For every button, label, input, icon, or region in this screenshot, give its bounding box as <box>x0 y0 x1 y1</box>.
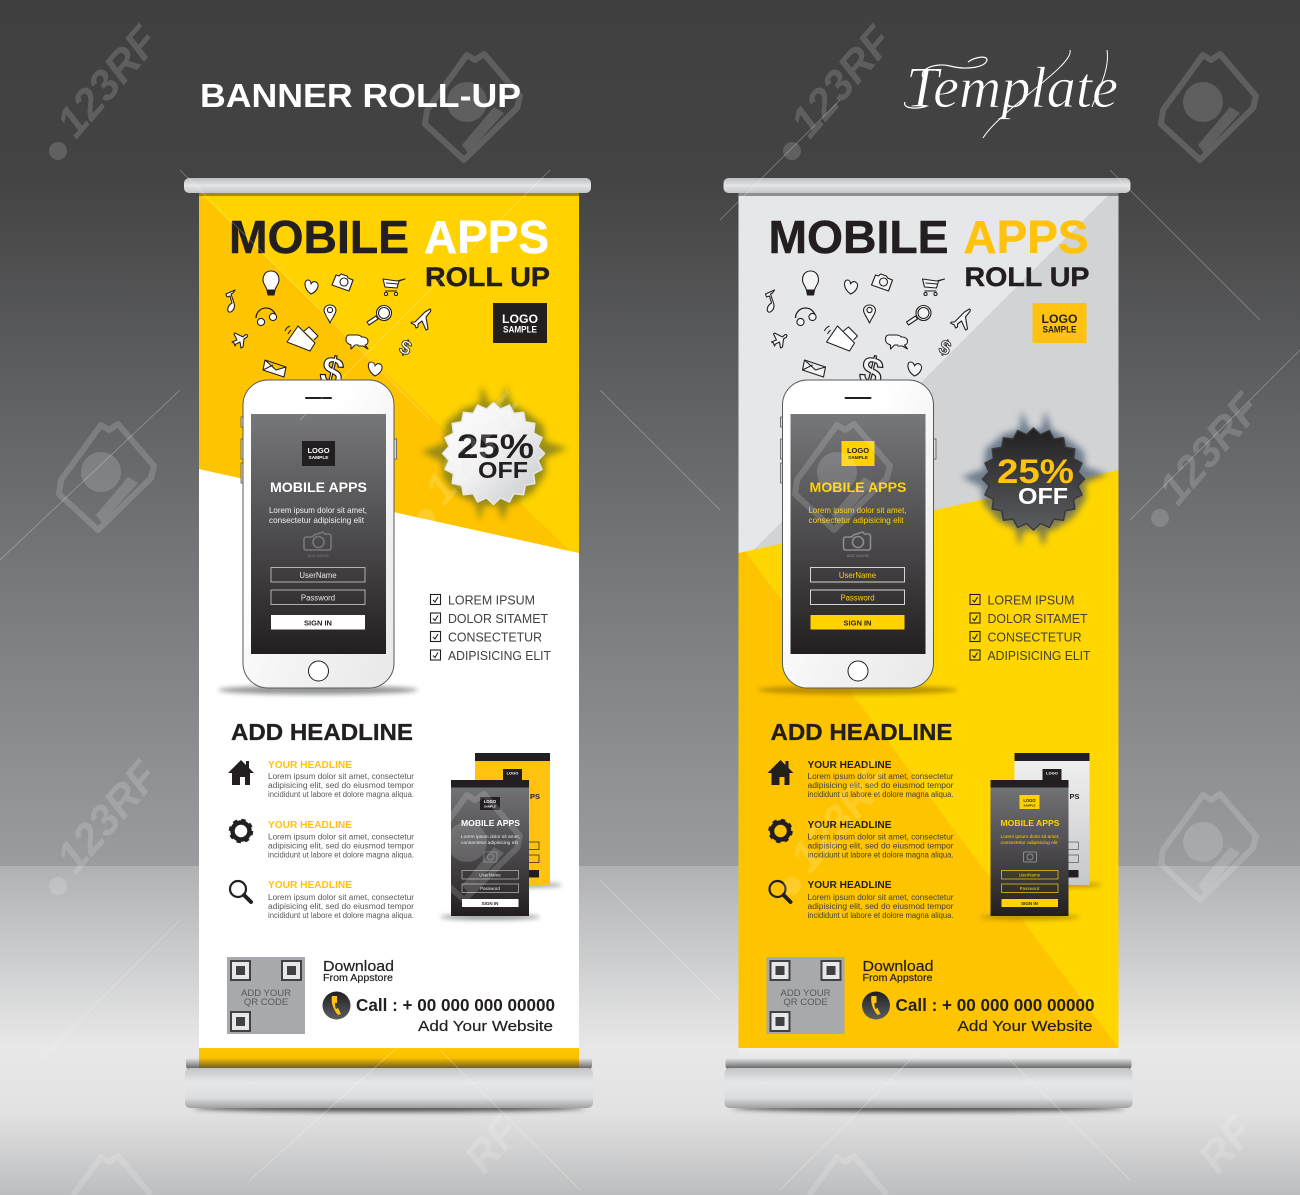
front app screen <box>980 780 1080 920</box>
feature one text: adipisicing elit, sed do eiusmod tempor <box>268 781 414 790</box>
camera icon: ADD IMAGE <box>307 553 330 558</box>
icon: home <box>768 760 794 785</box>
feature list <box>768 759 954 920</box>
feature two text: incididunt ut labore et dolore magna aliqua. <box>808 850 954 860</box>
screen text <box>269 505 367 525</box>
feature two text <box>268 819 414 860</box>
screen text: Lorem ipsum dolor sit amet, <box>808 505 906 515</box>
front app screen: UserName <box>1019 872 1041 878</box>
camera icon: ADD IMAGE <box>847 553 870 558</box>
feature three text: YOUR HEADLINE <box>268 879 352 891</box>
right banner bottom base <box>724 1068 1132 1108</box>
sign in button <box>810 615 904 630</box>
call number: Call : + 00 000 000 00000 <box>356 995 555 1015</box>
screen text: consectetur adipisicing elit <box>808 515 904 525</box>
phone call icon <box>862 992 890 1020</box>
front app screen: UserName <box>479 872 501 878</box>
password field <box>271 590 365 604</box>
username field: UserName <box>839 571 876 580</box>
feature two text <box>808 819 954 860</box>
checklist: DOLOR SITAMET <box>988 611 1088 626</box>
download label <box>323 958 394 984</box>
front app screen <box>440 780 540 920</box>
left banner panel <box>199 193 579 1048</box>
watermark overlay: RF <box>1189 1107 1264 1183</box>
home button <box>308 661 328 681</box>
floor shadow <box>193 1104 585 1112</box>
feature three text: adipisicing elit, sed do eiusmod tempor <box>268 902 414 911</box>
feature two text: Lorem ipsum dolor sit amet, consectetur <box>268 832 414 842</box>
logo box: LOGO <box>502 312 538 326</box>
back app screen: LOGO <box>1046 770 1058 776</box>
front app screen: Password <box>480 886 500 891</box>
front app screen: MOBILE APPS <box>461 818 520 828</box>
password field: Password <box>840 594 875 602</box>
download label: Download <box>862 958 934 975</box>
banner base shadow <box>726 1058 1132 1069</box>
wall background <box>0 0 1300 866</box>
feature three text: Lorem ipsum dolor sit amet, consectetur <box>808 893 954 902</box>
feature one text: Lorem ipsum dolor sit amet, consectetur <box>268 772 414 781</box>
front app screen: LOGO <box>484 799 497 804</box>
checklist: ADIPISICING ELIT <box>988 648 1090 663</box>
banner: right grey and yellow version <box>724 178 1132 1112</box>
headline: roll up: ROLL UP <box>425 262 550 292</box>
screen text <box>808 505 906 525</box>
feature one text: YOUR HEADLINE <box>808 759 892 771</box>
icon: search <box>230 881 251 902</box>
feature three text: Lorem ipsum dolor sit amet, consectetur <box>268 893 414 902</box>
screen logo: LOGO <box>307 446 330 455</box>
phone side buttons <box>780 417 936 483</box>
icon: search <box>770 881 790 902</box>
front app screen: LOGO <box>1023 798 1036 803</box>
camera icon <box>304 532 331 558</box>
checklist <box>430 592 551 663</box>
phone body <box>243 380 394 688</box>
phone mockup <box>241 380 396 688</box>
back app screen <box>475 753 562 888</box>
front app screen: Lorem ipsum dolor sit amet, <box>1000 834 1060 839</box>
icon: home <box>228 760 254 785</box>
watermark overlay: 123RF <box>1149 383 1271 514</box>
qr code box: QR CODE <box>244 997 288 1008</box>
feature one text <box>808 759 954 799</box>
add headline: ADD HEADLINE <box>231 719 413 745</box>
screen logo <box>302 441 335 466</box>
25% off badge: OFF <box>1018 483 1068 509</box>
phone shadow <box>758 686 958 694</box>
watermark overlay: 123RF <box>415 383 537 514</box>
logo box <box>1032 303 1086 343</box>
feature one text: adipisicing elit, sed do eiusmod tempor <box>808 781 954 790</box>
sign in button: SIGN IN <box>844 618 871 628</box>
phone shadow <box>218 686 418 694</box>
camera icon <box>844 532 870 558</box>
qr code box <box>227 957 305 1034</box>
watermark overlay: RF <box>455 1107 530 1183</box>
screen logo: LOGO <box>847 446 869 455</box>
page title: script template: Template <box>906 55 1118 120</box>
banner base shadow <box>186 1058 592 1069</box>
feature three text: incididunt ut labore et dolore magna aliqua. <box>268 911 414 920</box>
qr code box <box>766 957 844 1034</box>
front app screen: SAMPLE <box>484 804 496 808</box>
screen text: consectetur adipisicing elit <box>269 515 365 525</box>
download label: Download <box>323 958 394 975</box>
headline: mobile apps: MOBILE <box>768 211 948 263</box>
screen title: MOBILE APPS <box>810 480 906 495</box>
headline: mobile apps: MOBILE <box>229 211 409 263</box>
website: Add Your Website <box>958 1018 1092 1035</box>
front app screen: consectetur adipisicing elit <box>461 840 519 845</box>
25% off badge <box>962 411 1108 547</box>
headline: roll up: ROLL UP <box>964 262 1090 292</box>
download label <box>862 958 934 984</box>
right banner panel <box>738 193 1118 1048</box>
username field: UserName <box>299 571 337 580</box>
feature two text: adipisicing elit, sed do eiusmod tempor <box>268 842 414 850</box>
website: Add Your Website <box>418 1018 553 1035</box>
checklist: DOLOR SITAMET <box>448 611 548 626</box>
floating app icons: $ <box>855 348 888 396</box>
front app screen: SIGN IN <box>1021 901 1038 906</box>
back app screen <box>1014 753 1102 888</box>
headline: mobile apps <box>768 211 1088 263</box>
add headline: ADD HEADLINE <box>770 719 952 745</box>
feature one text <box>268 759 414 799</box>
feature two text: adipisicing elit, sed do eiusmod tempor <box>808 842 954 850</box>
icon: gear <box>770 820 791 842</box>
back app screen: PS <box>530 792 540 801</box>
watermark overlay: 123RF <box>781 751 903 882</box>
checklist: ADIPISICING ELIT <box>448 648 551 663</box>
feature one text: incididunt ut labore et dolore magna aliqua. <box>808 790 954 799</box>
feature one text: incididunt ut labore et dolore magna aliqua. <box>268 790 414 799</box>
icon: gear <box>230 820 252 842</box>
phone body <box>782 380 934 688</box>
front app screen: Lorem ipsum dolor sit amet, <box>461 834 520 839</box>
screen logo: SAMPLE <box>308 455 329 461</box>
feature three text: incididunt ut labore et dolore magna aliqua. <box>808 911 954 920</box>
watermark overlay: 123RF <box>47 751 169 882</box>
feature three text <box>808 879 954 920</box>
headline: mobile apps <box>229 211 549 263</box>
25% off badge <box>422 386 568 522</box>
25% off badge: OFF <box>478 457 528 483</box>
phone screen <box>790 414 926 654</box>
feature two text: incididunt ut labore et dolore magna aliqua. <box>268 850 414 860</box>
back app screen: LOGO <box>507 770 518 776</box>
logo box <box>493 303 547 343</box>
qr code box: ADD YOUR <box>241 988 291 999</box>
checklist: CONSECTETUR <box>448 630 542 644</box>
floating app icons <box>766 271 970 396</box>
floor background <box>0 866 1300 1195</box>
floating app icons: $ <box>396 336 414 361</box>
logo box: SAMPLE <box>503 324 537 334</box>
phone call icon <box>322 992 350 1020</box>
floating app icons: $ <box>316 348 348 396</box>
checklist <box>970 592 1090 663</box>
download label: From Appstore <box>323 972 393 984</box>
floor shadow <box>732 1104 1124 1112</box>
front app screen: SAMPLE <box>1023 804 1036 808</box>
checklist: LOREM IPSUM <box>988 592 1074 608</box>
checklist: LOREM IPSUM <box>448 592 535 608</box>
feature three text: adipisicing elit, sed do eiusmod tempor <box>808 902 954 911</box>
25% off badge: 25% <box>457 428 534 466</box>
phone screen <box>251 414 386 654</box>
download label: From Appstore <box>862 972 933 984</box>
feature one text: Lorem ipsum dolor sit amet, consectetur <box>808 772 954 781</box>
logo box: SAMPLE <box>1042 324 1076 334</box>
right banner bottom strip <box>738 1048 1118 1069</box>
password field: Password <box>301 594 335 602</box>
qr code box: QR CODE <box>783 997 828 1008</box>
phone side buttons <box>241 417 396 483</box>
watermark overlay: 123RF <box>47 16 169 147</box>
feature one text: YOUR HEADLINE <box>268 759 352 771</box>
feature two text: YOUR HEADLINE <box>268 819 352 831</box>
checklist: CONSECTETUR <box>988 630 1082 644</box>
username field <box>810 568 904 582</box>
feature three text: YOUR HEADLINE <box>808 879 892 891</box>
front app screen: SIGN IN <box>482 901 498 906</box>
back app screen: PS <box>1070 792 1080 801</box>
earpiece <box>844 397 872 399</box>
password field <box>810 590 904 604</box>
feature three text <box>268 879 414 920</box>
headline: mobile apps: APPS <box>964 211 1088 263</box>
screen text: Lorem ipsum dolor sit amet, <box>269 505 367 515</box>
front app screen: Password <box>1020 886 1040 891</box>
feature two text: Lorem ipsum dolor sit amet, consectetur <box>808 832 954 842</box>
phone mockup <box>780 380 936 688</box>
feature list <box>228 759 414 920</box>
earpiece <box>305 397 332 399</box>
screen title: MOBILE APPS <box>270 480 367 495</box>
left banner bottom base <box>185 1068 593 1108</box>
front app screen: consectetur adipisicing elit <box>1000 840 1058 845</box>
logo box: LOGO <box>1042 312 1078 326</box>
25% off badge: 25% <box>997 453 1074 491</box>
screen logo <box>842 441 874 466</box>
front app screen: MOBILE APPS <box>1000 818 1060 828</box>
qr code box: ADD YOUR <box>781 988 831 999</box>
call number: Call : + 00 000 000 00000 <box>896 995 1095 1015</box>
home button <box>848 661 868 681</box>
sign in button: SIGN IN <box>304 618 332 628</box>
left banner top bar <box>184 178 591 196</box>
left banner bottom yellow strip <box>199 1048 579 1069</box>
sign in button <box>271 615 365 630</box>
username field <box>271 568 365 582</box>
floating app icons <box>226 271 431 396</box>
banner: left yellow and white version <box>184 178 593 1112</box>
feature two text: YOUR HEADLINE <box>808 819 892 831</box>
floating app icons: $ <box>936 336 954 361</box>
right banner top bar <box>724 178 1130 196</box>
headline: mobile apps: APPS <box>424 211 549 263</box>
screen logo: SAMPLE <box>848 455 869 461</box>
watermark overlay: 123RF <box>781 16 903 147</box>
page title: banner roll-up: BANNER ROLL-UP <box>200 77 521 114</box>
